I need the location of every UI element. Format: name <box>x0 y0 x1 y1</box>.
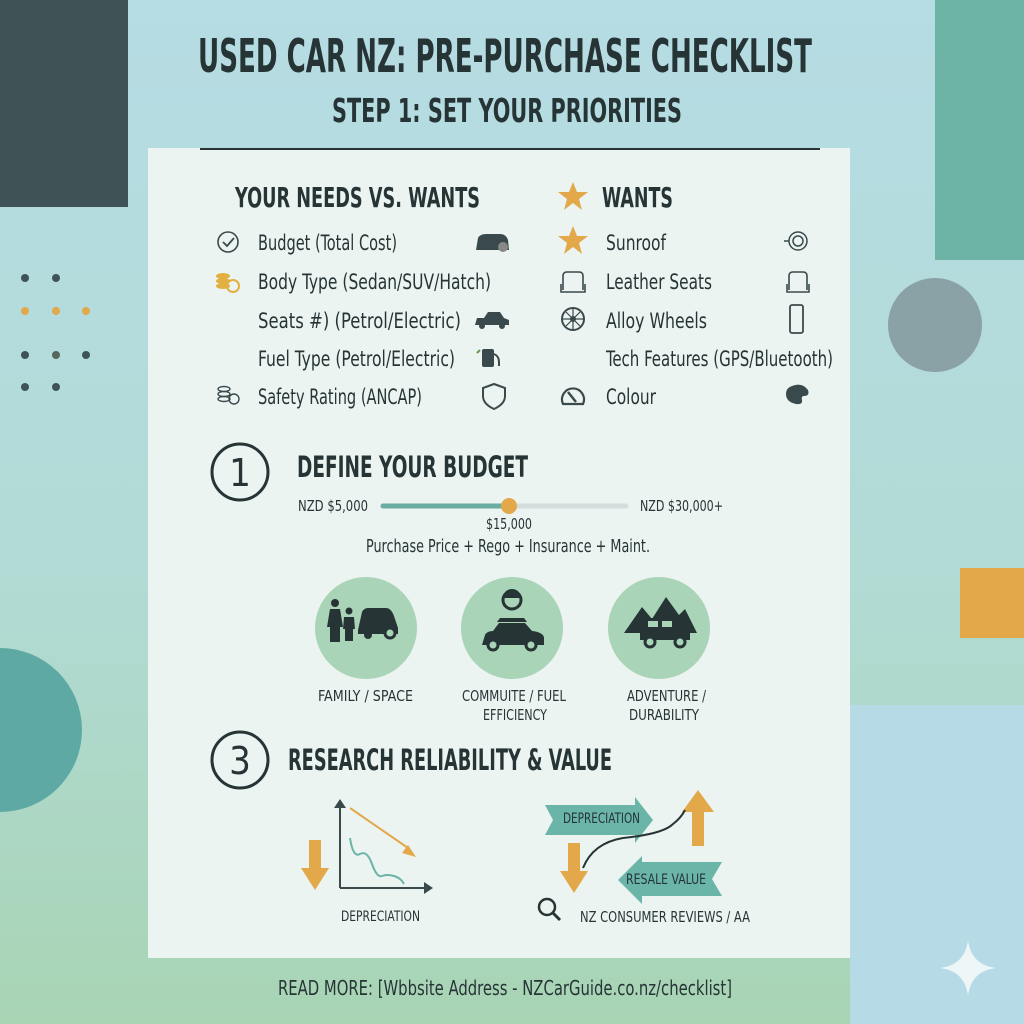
decor: orange block <box>960 568 1024 638</box>
needs list: Safety Rating (ANCAP) <box>258 385 422 409</box>
usage icons <box>315 577 710 724</box>
labels: ADVENTURE / <box>627 687 706 705</box>
slider: $15,000 <box>486 515 532 533</box>
subtitle: STEP 1: SET YOUR PRIORITIES <box>332 91 682 130</box>
chart: resale flow <box>539 790 751 926</box>
panel: needs vs wants <box>216 181 833 409</box>
chart: resale flow: DEPRECIATION <box>563 811 640 827</box>
heading: RESEARCH RELIABILITY & VALUE <box>288 743 612 777</box>
section: define budget <box>212 444 723 557</box>
labels: COMMUITE / FUEL <box>462 687 566 705</box>
heading: wants: WANTS <box>602 181 673 214</box>
chart: resale flow: NZ CONSUMER REVIEWS / AA <box>580 908 751 926</box>
section: research <box>212 732 751 926</box>
needs list: Budget (Total Cost) <box>258 231 397 255</box>
slider: NZD $30,000+ <box>640 497 723 515</box>
labels <box>318 687 706 724</box>
chart: depreciation <box>301 799 433 925</box>
slider <box>298 497 723 533</box>
slider: NZD $5,000 <box>298 497 368 515</box>
decor: light blue block bottom-right <box>850 705 1024 1024</box>
decor: teal half circle <box>0 648 82 812</box>
needs list <box>216 231 509 409</box>
badge 1 <box>212 444 268 500</box>
footer link: READ MORE: [Wbbsite Address - NZCarGuide.co.nz/checklist] <box>278 976 732 1000</box>
formula: Purchase Price + Rego + Insurance + Maint. <box>366 536 650 557</box>
wants list: Tech Features (GPS/Bluetooth) <box>605 347 833 371</box>
section: define budget: 1 <box>229 451 251 495</box>
wants list: Leather Seats <box>606 270 712 294</box>
labels: FAMILY / SPACE <box>318 687 413 705</box>
icon: sparkle <box>940 940 996 996</box>
wants list: Colour <box>606 385 656 409</box>
heading: DEFINE YOUR BUDGET <box>297 450 528 484</box>
decor: grey circle <box>888 278 982 372</box>
needs list: Seats #) (Petrol/Electric) <box>258 309 461 333</box>
section: research: 3 <box>229 739 251 783</box>
icon: commute <box>461 577 563 679</box>
heading: wants <box>558 181 673 214</box>
decor: dot grid <box>21 274 90 391</box>
chart: resale flow: RESALE VALUE <box>626 872 706 888</box>
labels: DURABILITY <box>629 706 700 724</box>
badge 3 <box>212 732 268 788</box>
needs list: Body Type (Sedan/SUV/Hatch) <box>258 270 491 294</box>
icon: adventure <box>608 577 710 679</box>
wants list: Alloy Wheels <box>606 309 707 333</box>
decor: dark block top-left <box>0 0 128 207</box>
icon: family <box>315 577 417 679</box>
needs list: Fuel Type (Petrol/Electric) <box>258 347 455 371</box>
labels: EFFICIENCY <box>483 706 548 724</box>
chart: depreciation: DEPRECIATION <box>341 909 420 925</box>
wants list: Sunroof <box>606 231 667 255</box>
heading: needs: YOUR NEEDS VS. WANTS <box>234 181 480 214</box>
main panel <box>148 148 850 958</box>
wants list <box>558 226 833 409</box>
decor: teal block top-right <box>935 0 1024 260</box>
